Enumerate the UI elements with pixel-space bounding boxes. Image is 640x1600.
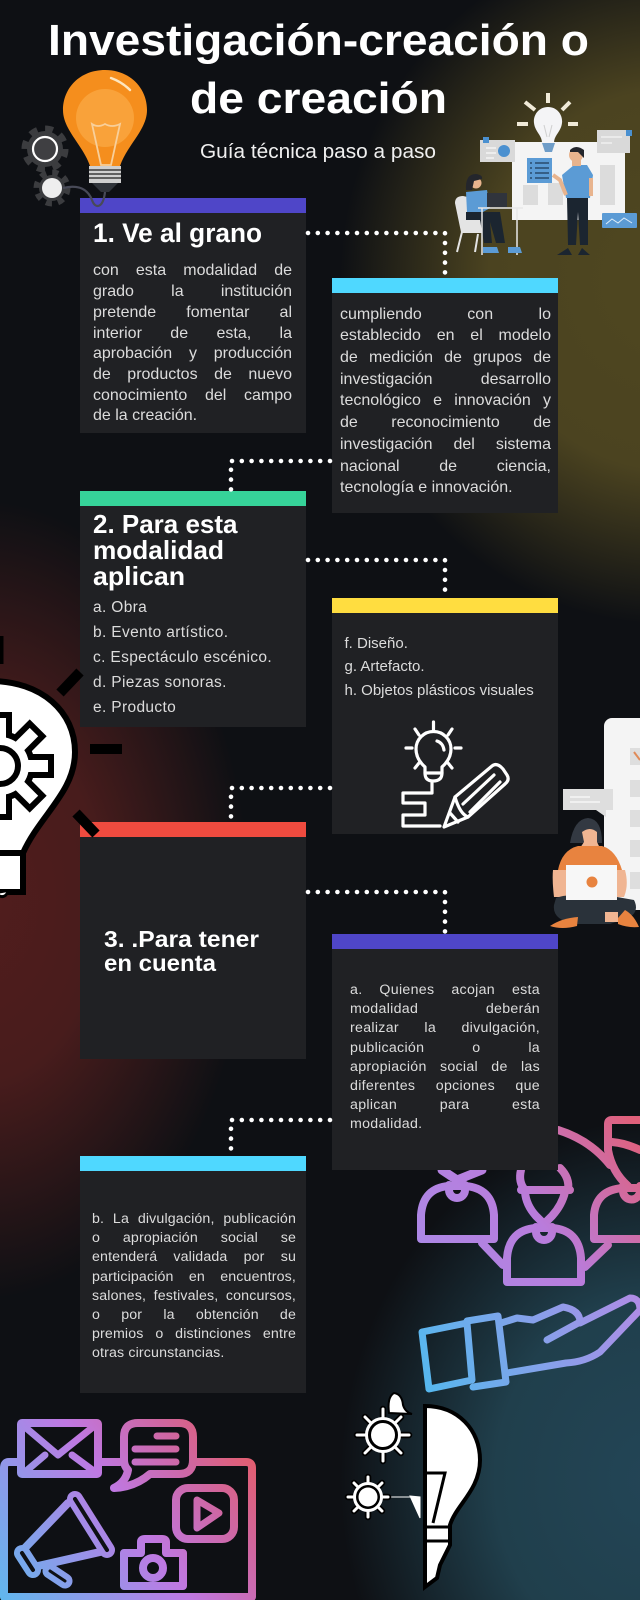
body text: de productos de nuevo xyxy=(93,366,292,383)
body text: aprobación y producción xyxy=(93,345,292,362)
list f to h: g. Artefacto. xyxy=(344,658,425,675)
color bar xyxy=(332,278,558,292)
body text xyxy=(92,1211,296,1361)
body text: interior de esta, la xyxy=(93,324,292,342)
color bar xyxy=(80,491,306,506)
body text xyxy=(93,262,292,424)
body text: investigación del sistema xyxy=(340,436,551,453)
body text: tecnológico e innovación y xyxy=(340,392,551,409)
panel: cumpliendo xyxy=(332,278,558,513)
body text: conocimiento del campo xyxy=(93,387,292,404)
list f to h: f. Diseño. xyxy=(344,635,408,652)
list a to e: b. Evento artístico. xyxy=(93,624,228,641)
list a to e: c. Espectáculo escénico. xyxy=(93,649,272,666)
body text: realizar la divulgación, xyxy=(350,1020,540,1036)
list a to e: e. Producto xyxy=(93,699,176,716)
heading: 1. Ve al grano xyxy=(93,218,262,248)
panel: 3. Para tener en cuenta xyxy=(80,822,306,1059)
man xyxy=(567,198,588,245)
color bar xyxy=(332,934,558,948)
heading: 2. Para esta xyxy=(93,509,238,539)
list a to e: d. Piezas sonoras. xyxy=(93,674,227,691)
body text: grado la institución xyxy=(93,283,292,300)
color bar xyxy=(332,598,558,612)
panel: 2. Para esta modalidad aplican xyxy=(80,491,306,727)
body text: de reconocimiento de xyxy=(340,414,551,431)
body text: premios o distinciones entre xyxy=(92,1326,296,1342)
panel: list f to h xyxy=(332,598,558,834)
color bar xyxy=(80,822,306,836)
body text: entenderá validada por su xyxy=(92,1249,296,1265)
body text: o apropiación social se xyxy=(92,1230,296,1246)
title: de creación xyxy=(190,74,447,123)
body text: participación en encuentros, xyxy=(92,1269,296,1285)
color bar xyxy=(80,1156,306,1170)
icon: lightbulb and pencil xyxy=(401,720,510,829)
body text: investigación desarrollo xyxy=(340,371,551,388)
color bar xyxy=(80,198,306,212)
list f to h xyxy=(344,635,534,699)
body text xyxy=(340,306,552,496)
panel: 1. Ve al grano xyxy=(80,198,306,433)
body text: a. Quienes acojan esta xyxy=(350,982,540,998)
bulb xyxy=(517,93,578,124)
heading: en cuenta xyxy=(104,950,216,976)
heading: aplican xyxy=(93,561,185,591)
title: Investigación-creación o xyxy=(48,16,589,65)
panel: b. La divulgación xyxy=(80,1156,306,1393)
heading xyxy=(93,509,238,591)
woman seated xyxy=(456,197,483,252)
body text: modalidad deberán xyxy=(350,1001,540,1017)
body text: b. La divulgación, publicación xyxy=(92,1211,296,1227)
body text: publicación o la xyxy=(350,1040,540,1056)
heading: 3. .Para tener xyxy=(104,926,259,952)
heading xyxy=(104,926,259,976)
body text: pretende fomentar al xyxy=(93,304,292,321)
body text: tecnología e innovación. xyxy=(340,479,513,496)
subtitle: Guía técnica paso a paso xyxy=(200,141,436,163)
board xyxy=(512,142,625,220)
panel: a. Quienes acojan xyxy=(332,934,558,1170)
heading: modalidad xyxy=(93,535,224,565)
body text: aplican para esta xyxy=(350,1097,540,1113)
body text: otras circunstancias. xyxy=(92,1345,224,1361)
list a to e xyxy=(93,599,272,716)
body text: de medición de grupos de xyxy=(340,349,551,366)
body text: nacional de ciencia, xyxy=(340,458,551,475)
body text: diferentes opciones que xyxy=(350,1078,540,1094)
body text: salones, festivales, concursos, xyxy=(92,1288,296,1304)
body text: establecido en el modelo xyxy=(340,327,551,344)
body text: de la creación. xyxy=(93,407,197,424)
body text: cumpliendo con lo xyxy=(340,306,551,323)
list a to e: a. Obra xyxy=(93,599,147,616)
body text xyxy=(350,982,540,1132)
body text: con esta modalidad de xyxy=(93,262,292,279)
list f to h: h. Objetos plásticos visuales xyxy=(344,682,534,699)
body text: o por la obtención de xyxy=(92,1307,296,1323)
megaphone capsules xyxy=(22,1499,107,1581)
body text: apropiación social de las xyxy=(350,1059,540,1075)
body text: modalidad. xyxy=(350,1116,422,1132)
